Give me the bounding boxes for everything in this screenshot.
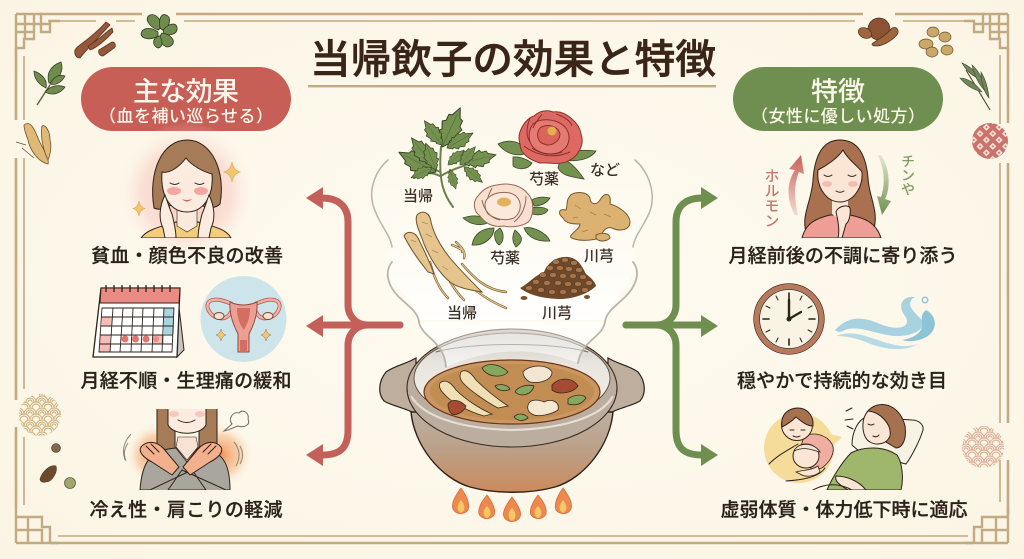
corner fret: top right <box>964 14 1008 48</box>
label: peony upper: 芍薬 <box>529 171 559 188</box>
steam lines <box>372 160 652 322</box>
decor: seigaiha circle right <box>962 426 1004 468</box>
right branching arrows <box>626 187 718 466</box>
icon: woman with hormone cycle <box>762 140 916 238</box>
heading pill: features <box>733 67 943 131</box>
label: angelica lower: 当帰 <box>447 304 477 322</box>
steam outline <box>371 160 653 320</box>
inner wall <box>414 333 610 423</box>
pot rim <box>407 329 617 447</box>
icon: woman with glowing face <box>132 125 242 248</box>
heading pill: features: 特徴 <box>811 77 865 107</box>
broth <box>424 360 600 424</box>
corner fret: top left <box>16 14 60 48</box>
label: etc: など <box>590 162 620 179</box>
panel: features <box>720 67 968 521</box>
decor: small roots <box>16 123 51 164</box>
heading pill: main effects: （血を補い巡らせる） <box>99 107 273 126</box>
icon: woman with hormone cycle: チンや <box>900 154 916 196</box>
icon: woman with hormone cycle: ホルモン <box>762 168 780 228</box>
icon: uterus <box>200 276 286 362</box>
icon: clay pot with decoction <box>380 322 644 492</box>
label: anemia: 貧血・顔色不良の改善 <box>91 245 283 267</box>
icon: wave <box>835 297 935 349</box>
panel: main effects <box>80 67 292 521</box>
icon: woman holding shoulders <box>123 405 253 490</box>
icon: mother with baby and resting woman <box>764 404 923 490</box>
label: cnidium upper: 川芎 <box>584 247 614 265</box>
label: cold: 冷え性・肩こりの軽減 <box>90 499 282 521</box>
steam into pot <box>419 322 605 367</box>
label: cnidium lower: 川芎 <box>542 304 572 322</box>
corner fret: bottom left <box>16 508 58 543</box>
label: angelica upper: 当帰 <box>403 187 433 205</box>
decor: cinnamon sticks <box>75 22 115 58</box>
decor: rosemary sprig <box>960 63 990 110</box>
icon: clock <box>754 284 824 354</box>
herbs group <box>394 103 630 322</box>
herb: cnidium seeds <box>520 257 596 300</box>
decor: spice pieces <box>857 18 898 46</box>
label: menstrual support: 月経前後の不調に寄り添う <box>728 245 958 267</box>
label: weak constitution: 虚弱体質・体力低下時に適応 <box>720 499 968 521</box>
label: peony lower: 芍薬 <box>490 250 520 267</box>
decor: sliced herbs <box>919 27 953 57</box>
herb: ginger rhizome <box>560 192 630 241</box>
corner fret: bottom right <box>966 508 1008 543</box>
heading pill: main effects <box>81 67 291 131</box>
ingredients <box>439 365 586 421</box>
pot handles <box>380 358 644 414</box>
heading pill: main effects: 主な効果 <box>133 77 239 107</box>
decor: herb sprig <box>34 62 65 105</box>
pot body <box>411 412 613 492</box>
left branching arrows <box>306 187 400 466</box>
herb: pale peony <box>463 184 550 247</box>
label: sustained: 穏やかで持続的な効き目 <box>737 370 947 392</box>
heading pill: features: （女性に優しい処方） <box>751 107 925 126</box>
herb: angelica leaves <box>394 103 498 207</box>
decor: lattice circle <box>972 123 1008 159</box>
herb: angelica root <box>404 212 506 308</box>
icon: calendar <box>93 285 184 357</box>
decor: seigaiha circle left <box>19 394 61 436</box>
label: menstrual: 月経不順・生理痛の緩和 <box>80 370 292 392</box>
title: 当帰飲子の効果と特徴 <box>310 38 716 82</box>
herb: red peony <box>498 111 596 179</box>
icon: flames <box>452 488 572 522</box>
decor: seeds <box>40 444 76 488</box>
decor: lobed leaf <box>141 15 177 48</box>
